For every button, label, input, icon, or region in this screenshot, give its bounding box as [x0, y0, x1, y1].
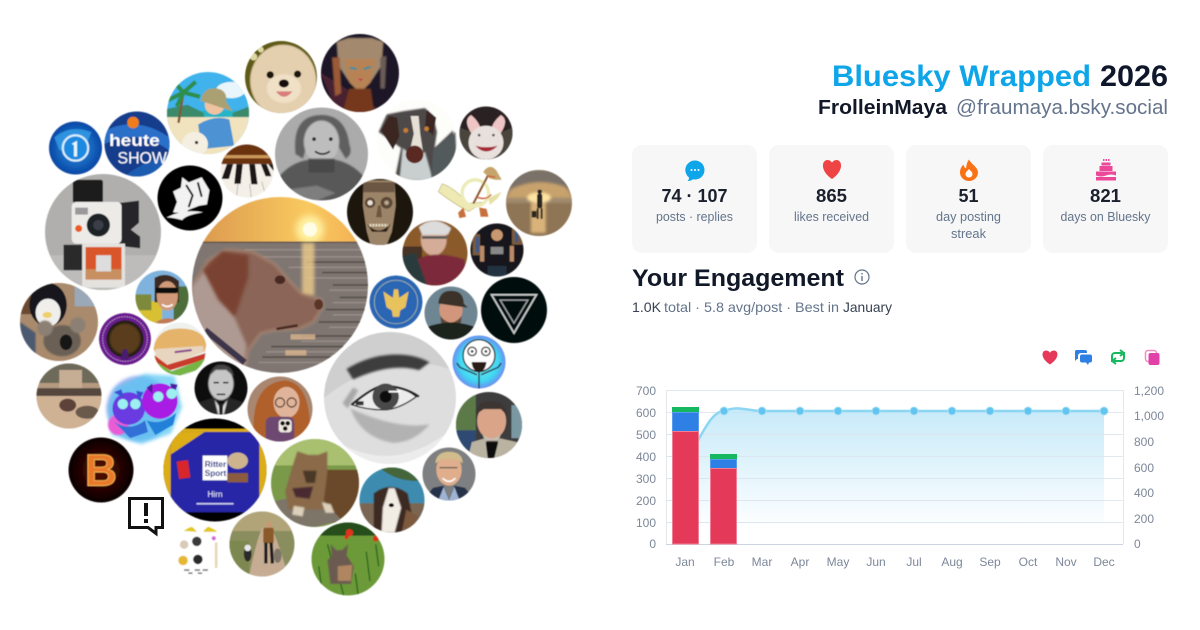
user handle: FrolleinMaya [818, 97, 948, 119]
avatar: Ritter Sport chocolate [164, 418, 266, 522]
month labels: May [827, 555, 849, 569]
avatar: lynx warrior [321, 34, 399, 112]
right axis labels: 800 [1134, 435, 1154, 449]
avatar cloud [20, 34, 572, 596]
icon: info [855, 270, 869, 284]
avatar: man in bookshop [470, 224, 524, 278]
user handle [818, 97, 1168, 119]
avatar: heute show: heute [109, 131, 160, 150]
avatar: Australian shepherd [360, 468, 424, 532]
left axis labels: 300 [636, 472, 656, 486]
panel: likes received: likes received [794, 210, 869, 224]
month labels: Aug [941, 555, 963, 569]
cumulative area [685, 408, 1104, 544]
month labels: Sep [979, 555, 1001, 569]
avatar: triangle logo [481, 277, 547, 343]
month labels: Jan [675, 555, 695, 569]
heading: Your Engagement: Your Engagement [632, 265, 844, 292]
panel: likes received [769, 145, 894, 253]
title: 2026 [1100, 60, 1168, 93]
left axis labels: 200 [636, 494, 656, 508]
left axis labels: 100 [636, 516, 656, 530]
icon: birthday cake [1096, 159, 1116, 180]
panel: day posting streak: 51 [958, 186, 978, 206]
left axis labels: 600 [636, 406, 656, 420]
bar: February [710, 454, 736, 544]
panel: likes received: 865 [816, 186, 847, 206]
right axis labels: 1,000 [1134, 409, 1164, 423]
title: Bluesky Wrapped [832, 60, 1091, 93]
icon: quotes legend [1146, 350, 1160, 365]
left axis labels: 400 [636, 450, 656, 464]
icon: flame [960, 160, 978, 181]
avatar: stick figure cartoon [452, 336, 506, 388]
cumulative line [685, 408, 1104, 463]
avatar: teddy penguin and koala [20, 283, 98, 361]
left axis labels: 500 [636, 428, 656, 442]
bar: January [672, 408, 698, 544]
avatar: purple badge [99, 313, 151, 365]
avatar: fluffy white dog [245, 41, 317, 117]
avatar: post horn and hobby horse [438, 167, 502, 218]
avatar: ship logo [158, 166, 222, 230]
avatar: heute show [104, 112, 170, 176]
avatar: polaroid camera [45, 174, 161, 290]
month labels: Dec [1093, 555, 1115, 569]
avatar: grey portrait of girl [275, 108, 368, 200]
right axis labels: 1,200 [1134, 384, 1164, 398]
panel: day posting streak: day posting [936, 210, 1001, 224]
icon: likes legend [1043, 350, 1057, 364]
avatar: woman with sunglasses [136, 270, 188, 324]
panel: days on Bluesky: days on Bluesky [1060, 210, 1151, 224]
avatar: black and white historic portrait [194, 362, 248, 414]
icon: replies legend [1075, 350, 1092, 365]
avatar: presidential seal [370, 276, 422, 328]
avatar: smiling man in beige jacket [456, 392, 522, 458]
left axis labels: 700 [636, 384, 656, 398]
panel: posts and replies: posts · replies [656, 210, 733, 224]
month labels [675, 555, 1115, 569]
user handle: @fraumaya.bsky.social [956, 97, 1168, 119]
panel: days on Bluesky: 821 [1090, 186, 1121, 206]
avatar: rock desert scene [36, 364, 102, 428]
month labels: Mar [752, 555, 772, 569]
left axis labels [636, 384, 656, 551]
right axis labels: 0 [1134, 537, 1141, 551]
avatar: tagesschau [49, 122, 102, 174]
icon: blocked avatar warning bubble [130, 498, 162, 534]
avatar: dog on tree stump [271, 439, 359, 527]
avatar: Ritter Sport chocolate: Sport [205, 469, 226, 478]
right axis labels: 200 [1134, 512, 1154, 526]
month labels: Nov [1055, 555, 1077, 569]
avatar: sandwich [154, 322, 206, 376]
panel: day posting streak: streak [951, 227, 987, 241]
avatar: dog in poppy meadow [312, 522, 384, 596]
avatar: tiki mask [347, 179, 413, 245]
avatar: collage of figures [178, 526, 218, 574]
avatar: piano keys [220, 144, 274, 198]
icon: chat bubble [685, 160, 704, 181]
icon: reposts legend [1112, 350, 1124, 364]
avatar: silhouette on beach at sunset [506, 170, 572, 236]
avatar: German pointer dog [377, 100, 457, 180]
right axis labels [1134, 384, 1164, 551]
avatar: older man with glasses [402, 220, 468, 286]
avatar: man in baseball cap [424, 286, 478, 340]
chart gridlines and axes [666, 390, 1124, 544]
cumulative points [720, 407, 1108, 415]
avatar: heute show: SHOW [117, 150, 168, 168]
left axis labels: 0 [649, 537, 656, 551]
engagement summary: total · 5.8 avg/post · Best in [664, 299, 839, 315]
avatar: eye drawing [324, 332, 456, 464]
right axis labels: 400 [1134, 486, 1154, 500]
month labels: Oct [1019, 555, 1038, 569]
panel: posts and replies [632, 145, 757, 253]
panel: day posting streak [906, 145, 1031, 253]
avatar: grinning rabbit [460, 106, 512, 160]
month labels: Feb [714, 555, 735, 569]
avatar: ginger woman taking selfie [248, 376, 312, 445]
month labels: Jun [866, 555, 886, 569]
panel: days on Bluesky [1043, 145, 1168, 253]
avatar: fiery letter B [68, 438, 134, 502]
engagement summary: 1.0K [632, 299, 662, 315]
engagement summary: January [843, 299, 892, 315]
month labels: Apr [791, 555, 809, 569]
avatar: blond man in suit [422, 448, 476, 500]
avatar: fiery letter B: B [85, 447, 117, 496]
avatar: woman walking dogs [230, 512, 294, 576]
avatar: sunset dog profile (largest) [192, 197, 368, 374]
right axis labels: 600 [1134, 461, 1154, 475]
combo chart: monthly engagement [636, 384, 1164, 569]
avatar: man with hat and dog [167, 72, 249, 156]
panel: posts and replies: 74 · 107 [662, 186, 728, 206]
avatar: Ritter Sport chocolate: Ritter [205, 460, 227, 469]
icon: heart [823, 160, 841, 179]
month labels: Jul [906, 555, 922, 569]
engagement summary [632, 299, 892, 315]
avatar: purple pugs sticker [107, 374, 182, 444]
chart legend icons [1043, 350, 1160, 365]
avatar: Ritter Sport chocolate: Hirn [207, 490, 223, 499]
